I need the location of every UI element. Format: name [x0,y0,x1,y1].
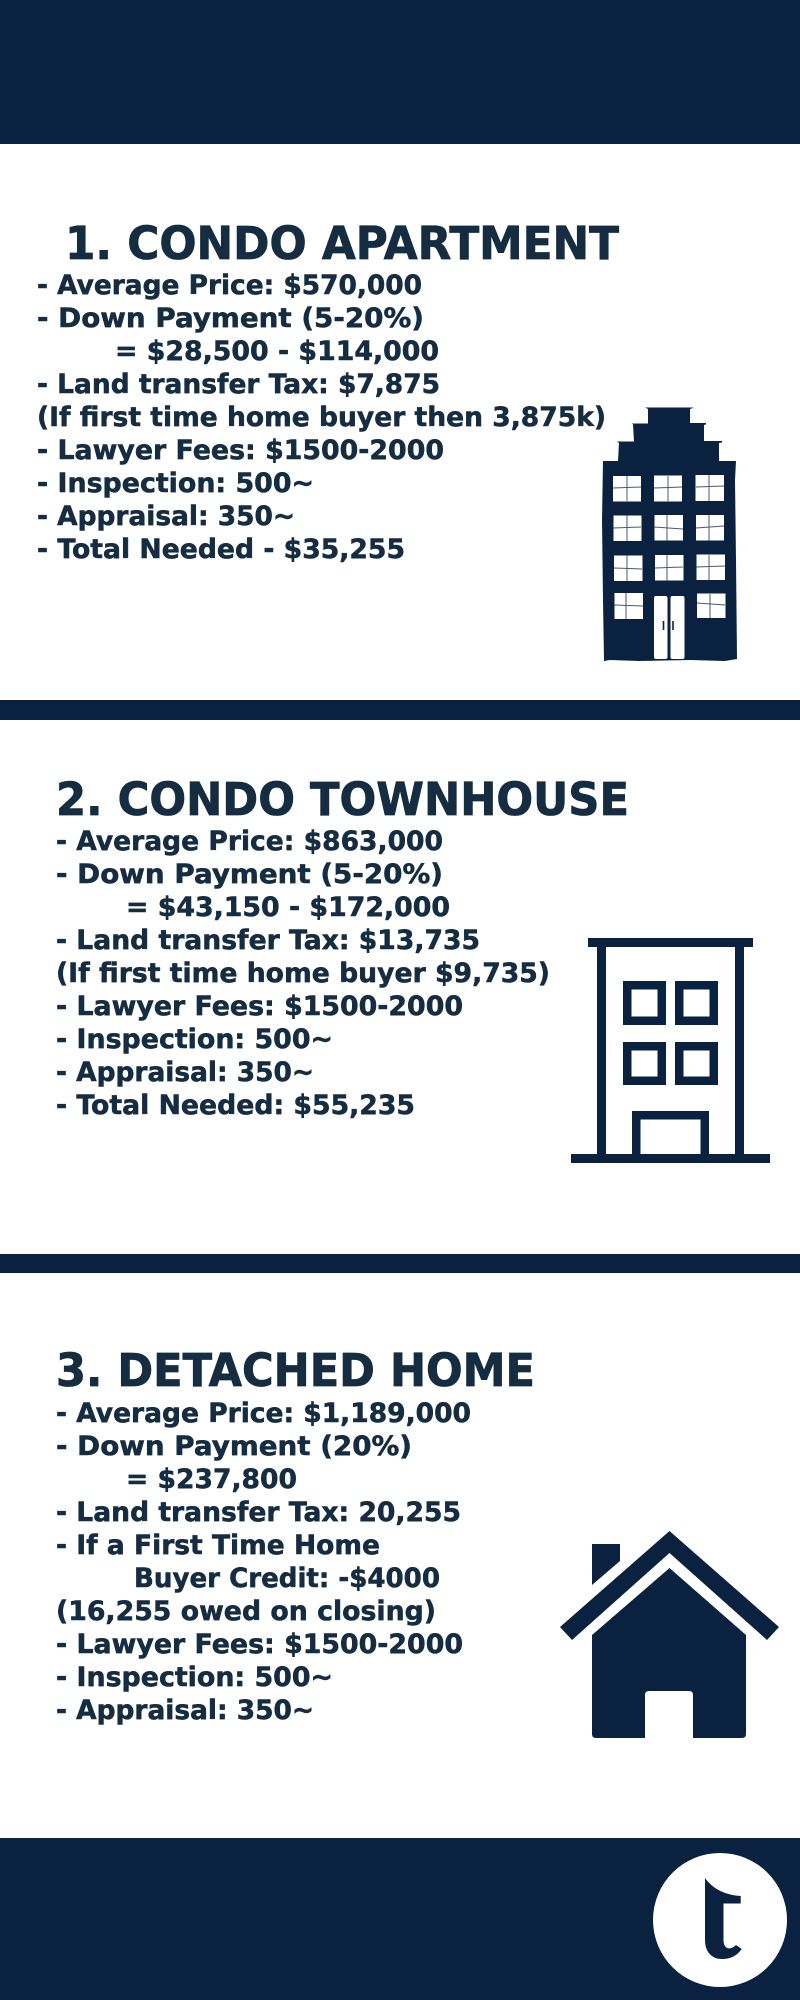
text block: condo apartment costs [37,270,606,565]
text block: detached home costs: - If a First Time Home [56,1530,380,1561]
text block: condo townhouse costs [56,826,550,1121]
text block: detached home costs: - Land transfer Tax: 20,255 [56,1497,461,1528]
icon: narrow townhouse building [602,408,737,661]
logo: t in white circle [653,1853,787,1987]
text block: condo apartment costs: - Inspection: 500~ [37,468,314,499]
icon: office building [571,938,770,1163]
text block: condo apartment costs: - Average Price: $570,000 [37,270,422,301]
text block: condo townhouse costs: - Average Price: $863,000 [56,826,443,857]
text block: condo apartment costs: - Total Needed - $35,255 [37,534,405,565]
text block: condo apartment costs: - Down Payment (5-20%) [37,303,424,334]
text block: condo townhouse costs: - Down Payment (5-20%) [56,859,443,890]
text block: detached home costs: - Appraisal: 350~ [56,1695,314,1726]
text block: detached home costs: - Average Price: $1,189,000 [56,1398,471,1429]
panel: condo apartment [37,217,737,661]
panel: condo townhouse [56,773,770,1163]
text block: detached home costs: - Inspection: 500~ [56,1662,333,1693]
top band [0,0,800,144]
text block: condo townhouse costs: = $43,150 - $172,000 [126,892,450,923]
text block: condo townhouse costs: - Land transfer Tax: $13,735 [56,925,480,956]
text block: condo townhouse costs: - Total Needed: $55,235 [56,1090,415,1121]
bottom band [0,1838,800,2000]
text block: condo apartment costs: - Lawyer Fees: $1500-2000 [37,435,444,466]
text block: detached home costs: - Lawyer Fees: $1500-2000 [56,1629,463,1660]
text block: condo townhouse costs: - Appraisal: 350~ [56,1057,314,1088]
panel: detached home [56,1344,779,1738]
divider band 2 [0,1254,800,1273]
text block: detached home costs [56,1398,471,1726]
icon: house [560,1531,779,1738]
text block: condo townhouse costs: - Inspection: 500~ [56,1024,333,1055]
heading: condo apartment: 1. CONDO APARTMENT [65,217,619,270]
text block: condo apartment costs: - Land transfer Tax: $7,875 [37,369,440,400]
heading: condo townhouse: 2. CONDO TOWNHOUSE [56,773,629,826]
text block: condo townhouse costs: - Lawyer Fees: $1500-2000 [56,991,463,1022]
text block: condo apartment costs: - Appraisal: 350~ [37,501,295,532]
text block: condo apartment costs: = $28,500 - $114,000 [115,336,439,367]
text block: condo apartment costs: (If first time home buyer then 3,875k) [37,402,606,433]
text block: condo townhouse costs: (If first time home buyer $9,735) [56,958,550,989]
text block: detached home costs: (16,255 owed on closing) [56,1596,436,1627]
heading: detached home: 3. DETACHED HOME [56,1344,535,1397]
divider band 1 [0,700,800,720]
text block: detached home costs: = $237,800 [126,1464,297,1495]
text block: detached home costs: - Down Payment (20%) [56,1431,412,1462]
text block: detached home costs: Buyer Credit: -$4000 [134,1563,440,1594]
